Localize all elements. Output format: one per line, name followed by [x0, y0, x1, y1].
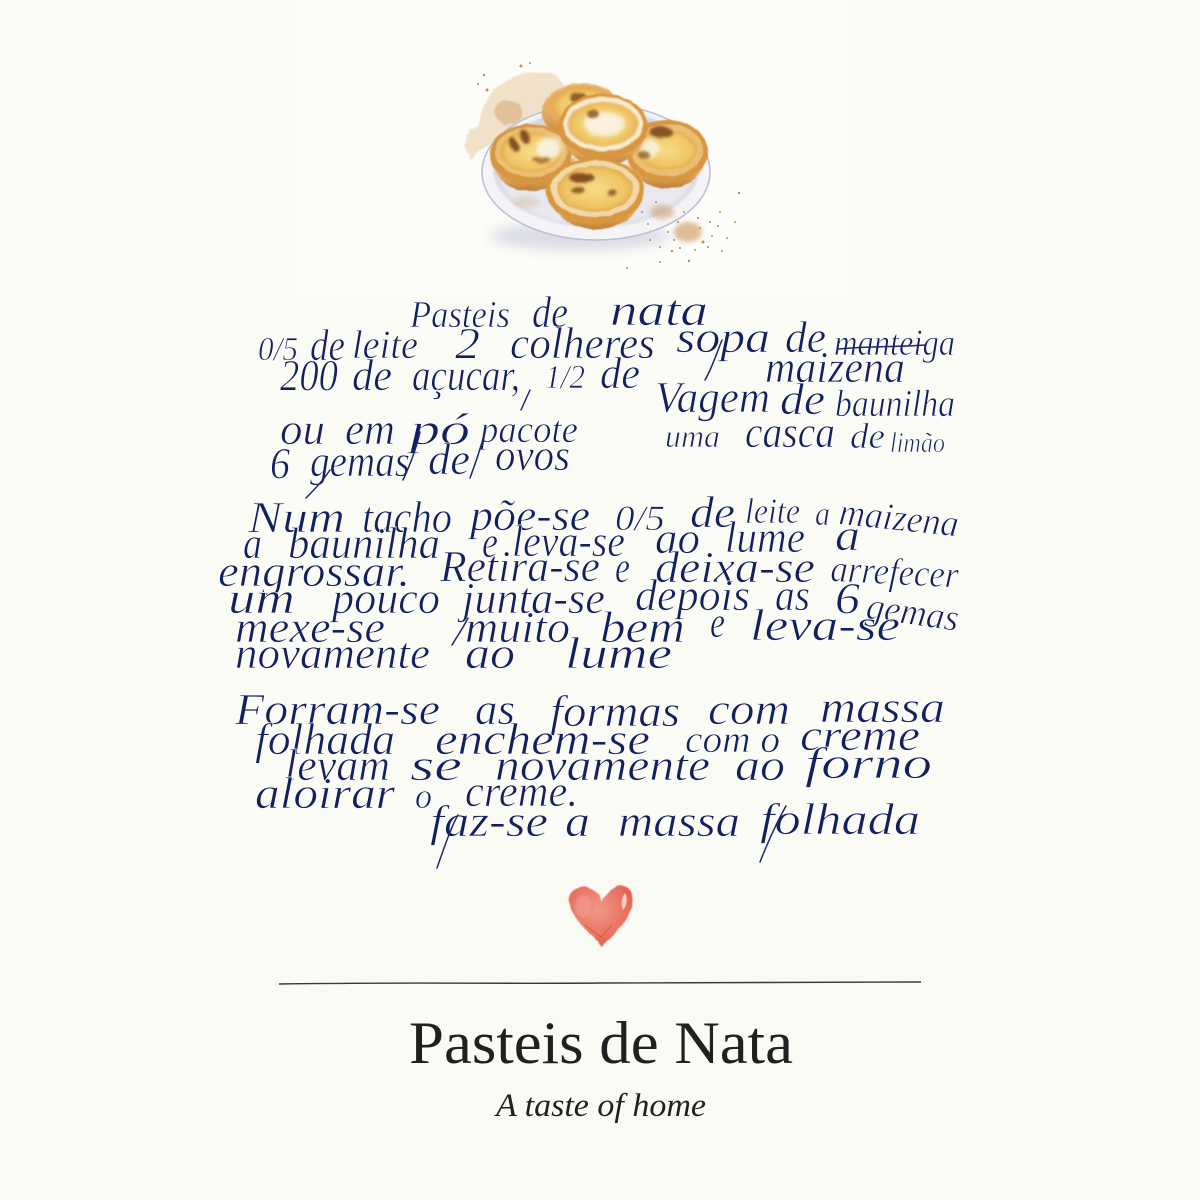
handwriting: closing note — [430, 795, 920, 846]
illustration: plate of pasteis de nata — [465, 62, 740, 269]
handwriting: recipe title: de — [532, 288, 568, 337]
handwriting: ingredients: pó — [406, 405, 470, 454]
handwriting: first paragraph: e — [482, 518, 498, 567]
handwriting: ingredients: 1/2 — [545, 359, 585, 396]
divider line — [279, 982, 921, 984]
cinnamon dust — [477, 62, 740, 269]
handwriting: ingredients: maizena — [765, 343, 905, 392]
handwriting: second paragraph: creme. — [465, 767, 578, 816]
icon: watercolor heart — [569, 886, 633, 947]
handwriting: ingredients: manteiga — [834, 323, 955, 364]
handwriting: second paragraph: levam — [285, 741, 390, 790]
handwriting: closing note: folhada — [760, 795, 920, 844]
handwriting: first paragraph: gemas — [864, 585, 962, 640]
handwriting: first paragraph: 6 — [835, 574, 860, 623]
handwriting: first paragraph: 0/5 — [615, 498, 665, 538]
tart: back — [542, 83, 622, 141]
handwriting: ingredients: ou — [280, 405, 325, 454]
handwriting: ingredients: 6 — [270, 439, 290, 488]
handwriting: second paragraph: com — [708, 685, 790, 734]
handwriting: ingredients: de — [600, 349, 640, 398]
handwriting: first paragraph: leva-se — [512, 517, 625, 566]
handwriting: ingredients: ovos — [495, 431, 570, 480]
handwriting: second paragraph: o — [415, 776, 432, 816]
handwriting: first paragraph: a — [835, 511, 860, 560]
handwriting: first paragraph: tacho — [362, 493, 452, 542]
handwriting: first paragraph: arrefecer — [830, 548, 960, 597]
handwriting: ingredients: 200 — [280, 351, 338, 400]
handwriting: ingredients: uma — [665, 418, 720, 454]
watercolor stain — [465, 74, 566, 160]
handwriting: first paragraph: baunilha — [288, 519, 440, 568]
handwriting: second paragraph: creme — [800, 711, 920, 760]
title: Pasteis de Nata — [409, 1010, 793, 1076]
handwritten recipe — [218, 286, 962, 846]
handwriting: first paragraph: põe-se — [467, 491, 590, 540]
subtitle: A taste of home — [494, 1088, 706, 1124]
handwriting: second paragraph: forno — [805, 739, 932, 788]
handwriting: first paragraph: a — [815, 496, 830, 533]
handwriting: first paragraph: pouco — [329, 574, 440, 623]
handwriting: ingredients: açucar, — [412, 351, 520, 400]
handwriting: ingredients: 2 — [455, 319, 480, 368]
handwriting: second paragraph: folhada — [255, 715, 395, 764]
handwriting: ingredients: em — [345, 405, 395, 454]
handwriting: second paragraph — [234, 683, 945, 818]
handwriting: ingredients: leite — [352, 322, 418, 367]
handwriting: ingredients: gemas — [310, 437, 410, 486]
handwriting: second paragraph: as — [475, 685, 515, 734]
handwriting: first paragraph: ao — [655, 514, 700, 563]
plate — [482, 104, 710, 240]
handwriting: ingredients: baunilha — [835, 383, 955, 425]
handwriting: second paragraph: ao — [735, 741, 785, 790]
handwriting: ingredients: de — [352, 351, 392, 400]
handwriting: first paragraph: leva-se — [750, 601, 900, 650]
handwriting: closing note: faz-se — [430, 797, 548, 846]
handwriting: first paragraph: engrossar. — [218, 547, 410, 596]
handwriting: first paragraph: Retira-se — [439, 542, 600, 591]
handwriting: ingredients: sopa — [676, 313, 770, 362]
plate shadow — [490, 222, 670, 250]
handwriting: second paragraph: novamente — [495, 741, 710, 790]
handwriting: first paragraph: as — [775, 571, 810, 620]
handwriting: first paragraph: lume — [725, 513, 805, 562]
handwriting: first paragraph: muito — [465, 603, 570, 652]
tart: right — [626, 120, 708, 188]
handwriting: first paragraph: mexe-se — [235, 603, 385, 652]
handwriting: ingredients: pacote — [477, 409, 578, 451]
handwriting: recipe title: Pasteis — [409, 294, 510, 336]
handwriting: first paragraph: leite — [745, 491, 800, 531]
handwriting: second paragraph: enchem-se — [435, 715, 650, 764]
handwriting: ingredients: Vagem — [655, 373, 770, 422]
handwriting: second paragraph: formas — [550, 687, 680, 736]
tart: left — [490, 124, 576, 191]
handwriting: first paragraph: e — [710, 598, 725, 647]
handwriting: first paragraph: Num — [247, 493, 345, 542]
handwriting: ingredients: de — [780, 375, 825, 424]
handwriting: ingredients: de — [310, 321, 345, 370]
handwriting: recipe title — [409, 286, 708, 337]
tart: top centre with sugar — [558, 94, 648, 165]
handwriting: first paragraph: depois — [635, 571, 750, 620]
handwriting: first paragraph: maizena — [837, 491, 961, 545]
handwriting: ingredients: 0/5 — [258, 331, 298, 368]
handwriting: second paragraph: massa — [820, 683, 945, 732]
handwriting: second paragraph: aloirar — [255, 769, 396, 818]
handwriting: first paragraph: bem — [600, 603, 685, 652]
handwriting: first paragraph: novamente — [235, 629, 430, 678]
handwriting: ingredients — [258, 313, 955, 488]
pen strokes: strike-through and long descenders — [306, 340, 925, 868]
tart: front — [546, 158, 644, 229]
handwriting: first paragraph: e — [615, 543, 630, 592]
handwriting: first paragraph: ao — [465, 629, 515, 678]
handwriting: ingredients: limão — [890, 428, 945, 459]
handwriting: first paragraph: um — [228, 574, 295, 623]
handwriting: closing note: massa — [618, 797, 740, 846]
handwriting: second paragraph: com o — [685, 719, 780, 761]
handwriting: second paragraph: Forram-se — [234, 685, 440, 734]
handwriting: ingredients: colheres — [510, 319, 655, 368]
handwriting: ingredients: de — [428, 435, 470, 484]
handwriting: first paragraph: junta-se — [457, 574, 605, 623]
handwriting: ingredients: de — [785, 313, 826, 362]
handwriting: recipe title: nata — [610, 286, 708, 335]
handwriting: closing note: a — [565, 797, 590, 846]
handwriting: second paragraph: se — [410, 741, 462, 790]
handwriting: first paragraph: a — [243, 519, 262, 568]
handwriting: first paragraph: deixa-se — [655, 543, 815, 592]
handwriting: ingredients: casca — [745, 408, 835, 457]
handwriting: first paragraph: lume — [565, 629, 672, 678]
handwriting: first paragraph: de — [690, 488, 735, 537]
handwriting: ingredients: de — [850, 416, 885, 456]
handwriting: first paragraph — [218, 488, 962, 678]
